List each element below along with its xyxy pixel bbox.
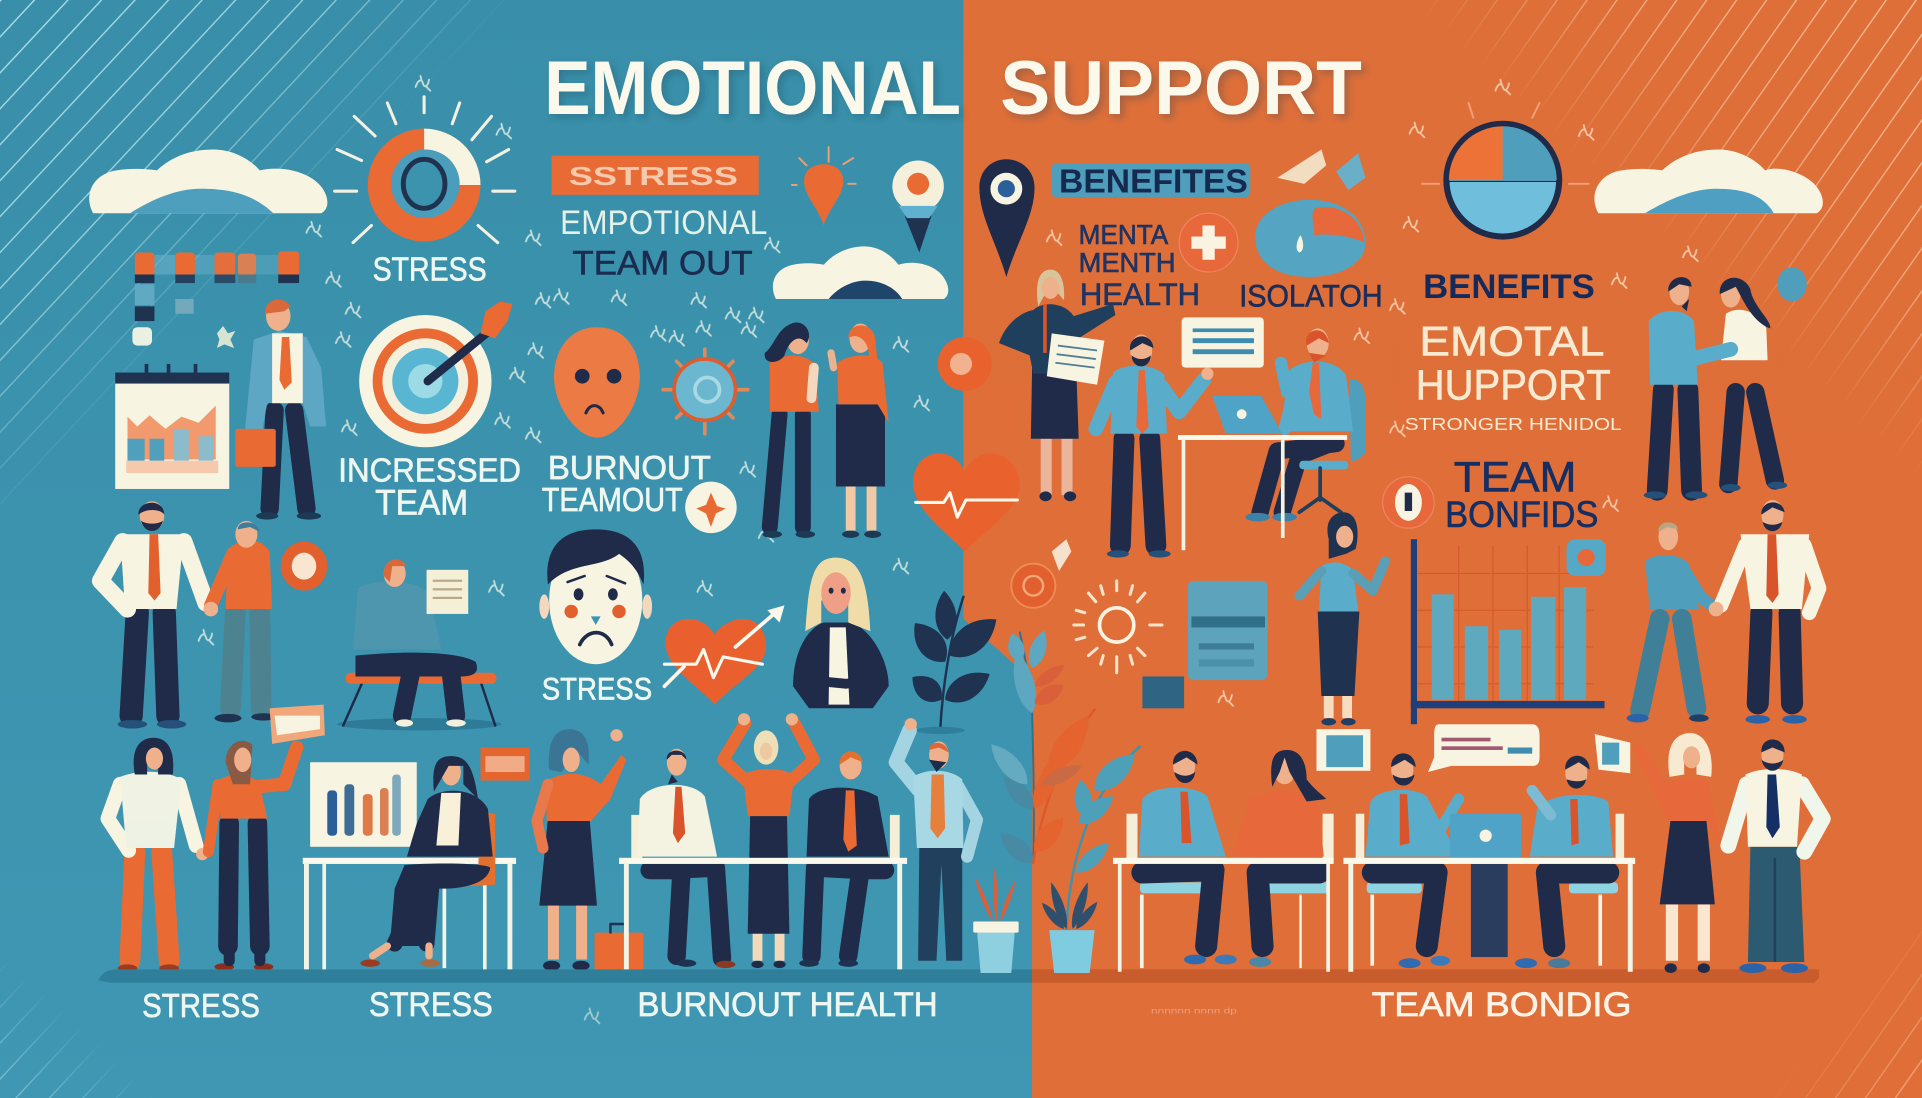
icon: printer cabinet: [1142, 581, 1267, 708]
icon: burst swirl: [663, 349, 748, 434]
panel: causes of stress: [89, 97, 1032, 1025]
panel: benefits: [972, 80, 1823, 1024]
label: emotal hupport: EMOTAL: [1419, 317, 1605, 364]
icon: isolation blob: [1255, 200, 1366, 277]
icon: stress gauge with rays: [335, 97, 515, 243]
ground strip right: [1032, 969, 1819, 983]
label: burnout teamout: BURNOUT: [548, 450, 711, 487]
figure: man and woman shaking hands: [101, 501, 276, 729]
figure: couple embracing: [1644, 277, 1787, 499]
icon: center plant group: [972, 628, 1142, 932]
icon: folder: [270, 705, 325, 744]
icon: dark plant: [905, 590, 1005, 734]
figure: stressed seated person: [337, 559, 501, 730]
icon: target with arrow: [359, 301, 512, 447]
label: burnout health: BURNOUT HEALTH: [637, 986, 938, 1024]
icon: small card badge: [1567, 539, 1606, 576]
label: benefits: BENEFITS: [1423, 268, 1595, 306]
icon: orange mask face: [554, 327, 640, 437]
speech card: [1182, 317, 1264, 368]
icon: heart with arrow: [664, 605, 784, 705]
desk: fourth table with two men and laptop: [1343, 753, 1635, 972]
label: team bonfids: TEAM: [1454, 453, 1576, 501]
label: team bonfids: BONFIDS: [1445, 494, 1598, 535]
icon: medical plus: [1179, 213, 1238, 272]
label banner: stress: [552, 156, 759, 195]
figure: man with raised arm: [896, 718, 977, 961]
label: mental health: MENTA: [1079, 218, 1168, 250]
icon: flower pot two: [1049, 930, 1095, 973]
scattered doodles left: [199, 0, 929, 1023]
figure: woman in blue: [1299, 512, 1385, 725]
icon: cloud middle: [773, 246, 948, 299]
desk: third table with two people: [1113, 750, 1334, 972]
note card: [427, 570, 468, 614]
icon: teal dot badge: [1777, 267, 1807, 301]
title: SUPPORT: [1000, 46, 1362, 131]
chart board: [310, 762, 417, 847]
bar chart: [1411, 539, 1605, 724]
label: stronger henidol: STRONGER HENIDOL: [1405, 414, 1622, 434]
small icons near isolation: [1277, 150, 1366, 190]
label: emotal hupport: [1416, 317, 1611, 409]
label: burnout teamout: [542, 450, 711, 519]
icon: sun ring: [1074, 581, 1162, 673]
label: mental health: MENTH: [1079, 246, 1176, 278]
label: team bonding: TEAM BONDIG: [1372, 986, 1631, 1024]
small card: [1595, 734, 1630, 773]
label: team bonfids: [1445, 453, 1598, 535]
icon: flower pot one: [973, 922, 1019, 973]
label: isolatoh: ISOLATOH: [1239, 277, 1383, 313]
icon: cloud right: [1594, 150, 1823, 213]
figure: laughing blonde woman: [1633, 733, 1721, 973]
chart card: [115, 364, 229, 489]
figure: woman with hand on head: [537, 729, 626, 971]
icon: light bulb: [892, 161, 944, 252]
icon: sad face: [539, 529, 652, 664]
figure: blonde woman with paper: [999, 270, 1115, 501]
label: stress bottom one: STRESS: [142, 988, 260, 1025]
label banner: benefites: BENEFITES: [1059, 163, 1248, 200]
figure: two women holding hands: [108, 738, 297, 972]
label: stress bottom two: STRESS: [369, 986, 493, 1024]
label: incressed team: [338, 453, 521, 523]
title: [544, 46, 1362, 131]
figure: standing man navy tie: [1728, 740, 1823, 973]
figure: two women talking: [762, 323, 889, 538]
figure: blonde woman: [793, 558, 889, 708]
icon: face badge: [281, 542, 327, 591]
icon: sticky color strips: [132, 251, 299, 348]
label: burnout teamout: TEAMOUT: [542, 482, 683, 519]
title: EMOTIONAL: [544, 46, 961, 131]
faint label: nnnnnn nnnn dp: [1151, 1005, 1237, 1015]
label banner: stress: SSTRESS: [569, 163, 738, 191]
desk: second table group: [619, 713, 907, 971]
label: mental health: HEALTH: [1080, 276, 1200, 312]
speech bubble: [1428, 724, 1540, 772]
label: incressed team: TEAM: [375, 483, 468, 523]
icon: cloud left: [89, 150, 327, 213]
figure: handshake pair: [1627, 500, 1819, 724]
icon: location pin: [979, 159, 1035, 277]
label: stress: STRESS: [373, 252, 487, 289]
icon: rose: [1011, 539, 1071, 608]
blue card: [1316, 729, 1370, 771]
icon: orange circle badge: [938, 337, 992, 391]
label: stress center: STRESS: [542, 671, 652, 707]
desk: first table with seated woman: [303, 756, 516, 971]
scattered doodles right: [1047, 80, 1698, 706]
label: team out: TEAM OUT: [572, 245, 753, 282]
label: empotional: EMPOTIONAL: [560, 204, 767, 242]
figure: seated man at laptop: [1178, 328, 1366, 550]
icon: pie chart: [1422, 103, 1589, 237]
label: emotal hupport: HUPPORT: [1416, 362, 1611, 409]
icon: briefcase: [594, 924, 644, 971]
icon: bubble with star: [685, 482, 737, 533]
label: mental health: [1079, 218, 1200, 312]
ground strip left: [98, 969, 1032, 983]
figure: presenter man: [1096, 335, 1214, 558]
icon: orange bulb: [792, 147, 856, 225]
sign: [480, 748, 530, 781]
figure: man with briefcase: [235, 299, 326, 520]
panel: orange right background: [963, 0, 1922, 1098]
icon: keyhole badge: [1383, 477, 1434, 528]
icon: heart with pulse: [913, 453, 1020, 551]
label: incressed team: INCRESSED: [338, 453, 521, 490]
